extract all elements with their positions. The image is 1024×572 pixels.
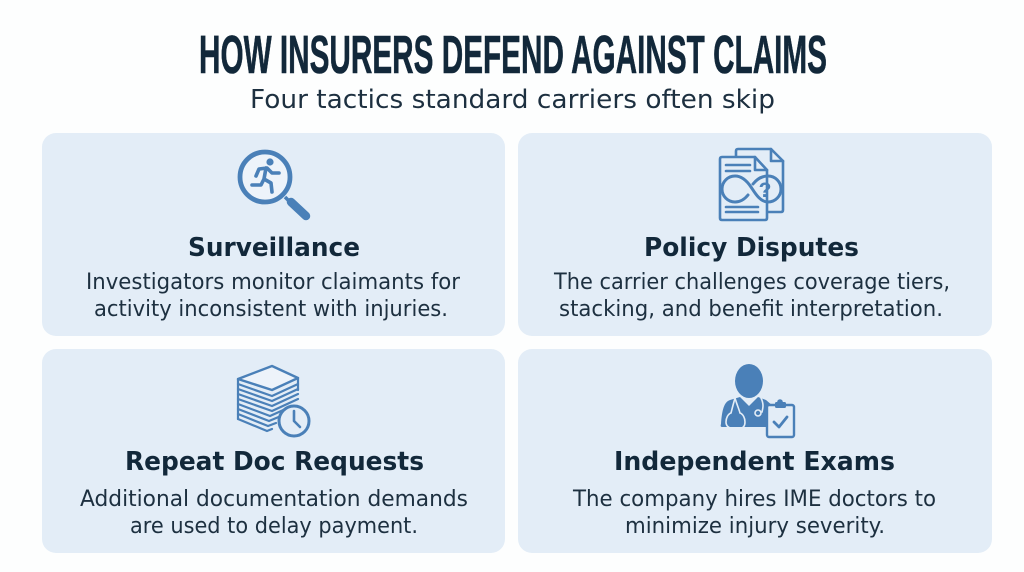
text block: are used to delay payment. (130, 513, 418, 539)
text block: The carrier challenges coverage tiers, (553, 269, 950, 295)
text block (572, 486, 936, 539)
text block: activity inconsistent with injuries. (94, 296, 448, 322)
heading: Independent Exams (614, 447, 895, 477)
heading: Repeat Doc Requests (125, 447, 424, 477)
text block: Additional documentation demands (80, 486, 468, 512)
text block: Investigators monitor claimants for (86, 269, 461, 295)
icon: documents with link and question mark (720, 149, 783, 220)
text block (80, 486, 468, 539)
panel: repeat doc requests (42, 349, 505, 553)
heading: Policy Disputes (644, 233, 859, 263)
panel: independent exams (518, 349, 992, 553)
icon: paper stack with clock (238, 366, 309, 436)
icon: doctor with clipboard (721, 364, 794, 437)
panel: surveillance (42, 133, 505, 336)
heading: Surveillance (188, 233, 360, 263)
subtitle: Four tactics standard carriers often skip (250, 85, 775, 115)
panel: policy disputes (518, 133, 992, 336)
text block: stacking, and benefit interpretation. (559, 296, 943, 322)
text block: minimize injury severity. (625, 513, 885, 539)
icon: magnifier with running person (240, 152, 306, 216)
icon: documents with link and question mark: ? (759, 179, 771, 202)
text block (86, 269, 461, 322)
text block: The company hires IME doctors to (572, 486, 936, 512)
text block (553, 269, 950, 322)
